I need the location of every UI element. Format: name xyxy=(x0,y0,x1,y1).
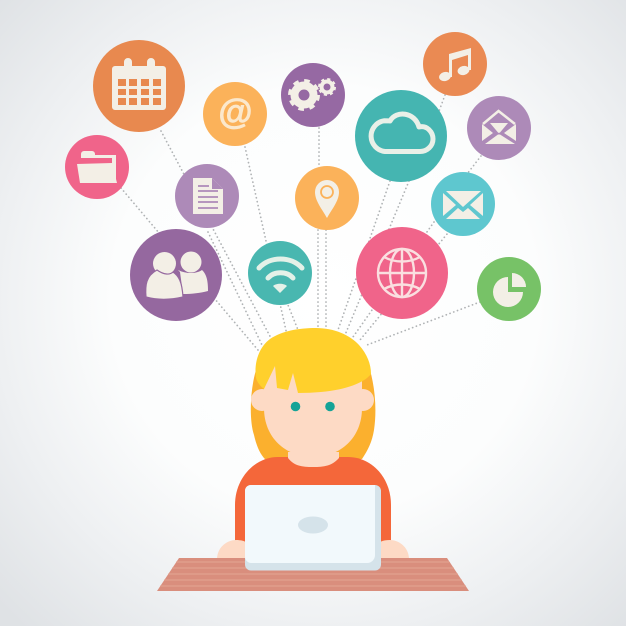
shirt xyxy=(235,457,391,545)
table xyxy=(157,558,469,591)
right hand xyxy=(379,540,409,558)
icon: wifi xyxy=(248,241,312,305)
icon: document xyxy=(175,164,239,228)
icon: globe xyxy=(356,227,448,319)
ears xyxy=(251,389,374,411)
face xyxy=(264,358,362,457)
icon: gears xyxy=(281,63,345,127)
icon: people xyxy=(130,229,222,321)
dotted connector lines xyxy=(121,95,481,350)
left hand xyxy=(217,540,247,558)
icon: open envelope xyxy=(467,96,531,160)
neck xyxy=(288,452,339,467)
icon: at sign: @ xyxy=(218,92,253,132)
icon: location pin xyxy=(295,166,359,230)
icon: at sign xyxy=(203,82,267,146)
laptop xyxy=(245,485,381,570)
person xyxy=(217,328,409,558)
icon: cloud xyxy=(355,90,447,182)
icon: pie chart xyxy=(477,257,541,321)
back hair xyxy=(251,370,375,459)
eyes xyxy=(291,402,335,411)
icon: calendar xyxy=(93,40,185,132)
icon: music note xyxy=(423,32,487,96)
icon: folder xyxy=(65,135,129,199)
front hair xyxy=(256,328,371,393)
icon: envelope xyxy=(431,172,495,236)
